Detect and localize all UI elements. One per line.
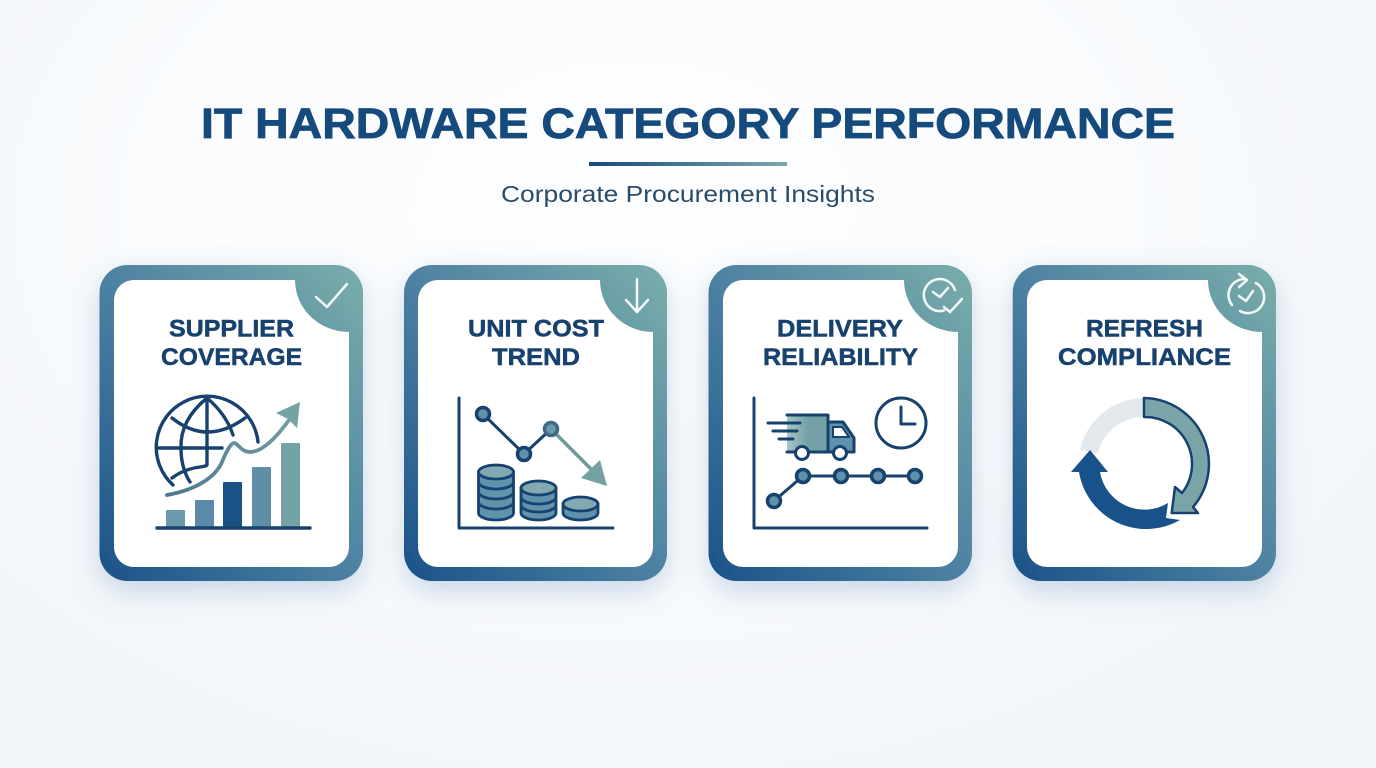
icon: clock bbox=[876, 398, 926, 448]
icon: down arrow badge bbox=[626, 279, 648, 312]
panel: unit cost trend bbox=[404, 265, 667, 581]
heading: unit cost trend bbox=[468, 316, 604, 371]
icon: globe bbox=[156, 396, 258, 485]
chart: falling cost line bbox=[476, 408, 607, 486]
heading: supplier coverage: SUPPLIER bbox=[169, 316, 294, 342]
title underline bbox=[589, 162, 787, 166]
heading: delivery reliability: RELIABILITY bbox=[763, 344, 918, 371]
heading: refresh compliance bbox=[1058, 316, 1231, 371]
arrow: growth trend bbox=[167, 402, 300, 495]
icon: clock check badge bbox=[924, 279, 962, 312]
navy arrow segment bbox=[1071, 450, 1180, 529]
teal arrow segment bbox=[1144, 398, 1209, 513]
chart: on-time line bbox=[768, 470, 922, 508]
chart: rising bars bbox=[157, 443, 310, 528]
heading: unit cost trend: UNIT COST bbox=[468, 316, 604, 342]
heading: delivery reliability: DELIVERY bbox=[777, 316, 903, 342]
gray ring segment bbox=[1080, 398, 1143, 453]
panel: refresh compliance bbox=[1013, 265, 1276, 581]
icon: delivery truck bbox=[768, 415, 854, 460]
heading: supplier coverage: COVERAGE bbox=[161, 344, 302, 371]
title: IT HARDWARE CATEGORY PERFORMANCE bbox=[201, 100, 1175, 148]
heading: delivery reliability bbox=[763, 316, 918, 371]
icon: refresh check badge bbox=[1228, 274, 1264, 313]
panel: delivery reliability bbox=[708, 265, 972, 581]
panel: supplier coverage bbox=[100, 265, 363, 581]
chart axes bbox=[754, 398, 927, 528]
heading: supplier coverage bbox=[161, 316, 302, 371]
subtitle: Corporate Procurement Insights bbox=[501, 181, 875, 207]
heading: refresh compliance: COMPLIANCE bbox=[1058, 344, 1231, 371]
icon: refresh cycle arrows bbox=[1071, 398, 1209, 529]
heading: unit cost trend: TREND bbox=[492, 344, 580, 371]
heading: refresh compliance: REFRESH bbox=[1086, 316, 1203, 342]
chart axes bbox=[459, 398, 613, 528]
icon: check badge bbox=[316, 284, 347, 307]
icon: coin stacks bbox=[478, 465, 598, 520]
